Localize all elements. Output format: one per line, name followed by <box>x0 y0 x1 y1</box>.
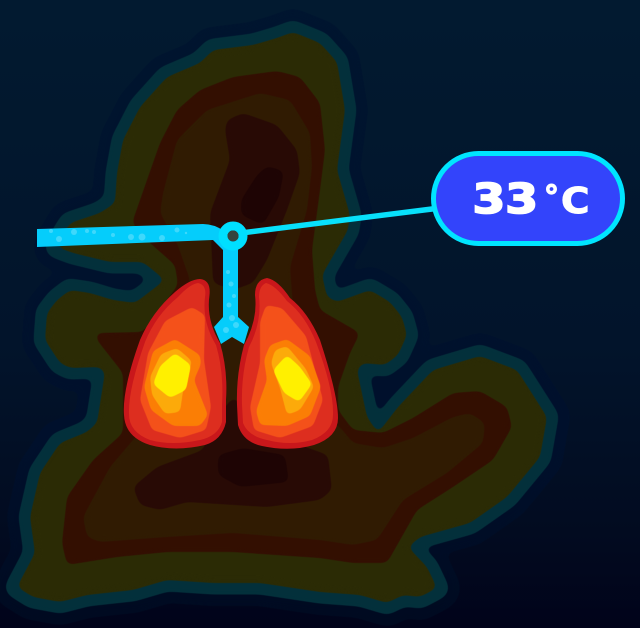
thermal body silhouette <box>17 32 547 603</box>
left lung <box>124 279 226 448</box>
darkest core: head <box>241 166 284 225</box>
airway tube <box>37 224 249 344</box>
connector line to temperature label <box>245 208 436 232</box>
heat layer 3 <box>150 348 192 414</box>
heat layer 1 <box>250 305 323 438</box>
navy halo <box>17 32 547 603</box>
maroon core: head <box>210 113 300 290</box>
olive contour <box>17 32 547 603</box>
tube bubbles <box>49 228 239 333</box>
heat core <box>273 355 312 402</box>
heat layer 2 <box>256 339 321 426</box>
lung outline <box>237 278 338 449</box>
brown contour <box>83 93 485 545</box>
red-brown contour <box>62 71 512 565</box>
darkest core: chest <box>218 448 289 487</box>
temperature label: 33°C <box>434 154 622 244</box>
temperature label: 33°C: ° <box>544 180 559 215</box>
heat layer 2 <box>144 339 208 426</box>
temperature label: 33°C: 33 <box>472 176 538 223</box>
temperature label: 33°C: C <box>561 179 590 222</box>
heat layer 1 <box>140 307 211 438</box>
right lung <box>237 278 338 449</box>
lung body <box>242 283 333 443</box>
maroon core: chest <box>133 397 332 510</box>
trachea and bronchi <box>213 236 249 344</box>
heat core <box>153 353 191 398</box>
horizontal tube <box>37 224 228 247</box>
lung body <box>129 283 222 443</box>
lung outline <box>124 279 226 448</box>
teal contour <box>17 32 547 603</box>
heat layer 3 <box>271 346 314 415</box>
measurement ring <box>223 226 243 246</box>
